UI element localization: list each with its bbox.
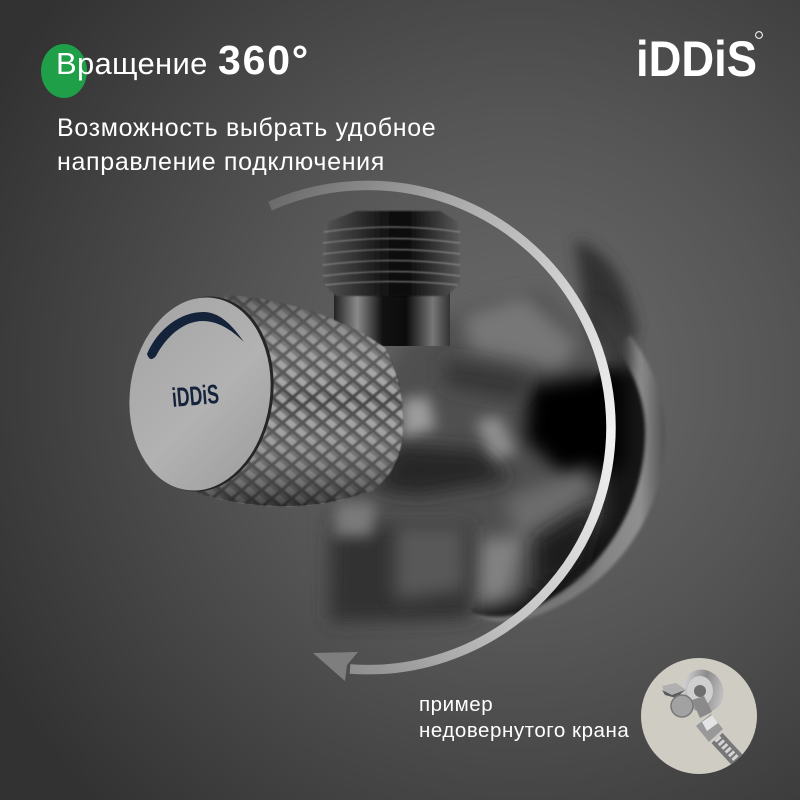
neck <box>334 284 450 346</box>
thread <box>323 211 460 296</box>
caption: пример <box>419 693 493 716</box>
arrowhead <box>313 652 358 681</box>
rotation ring with arrow <box>270 185 611 681</box>
valve cap <box>671 695 693 717</box>
lever <box>662 683 686 695</box>
green accent blob <box>41 44 87 98</box>
top threaded fitting <box>323 211 460 346</box>
description: Возможность выбрать удобное <box>57 114 436 142</box>
description: направление подключения <box>57 148 385 176</box>
cap logo: iDDiS <box>171 379 220 413</box>
wall flange chrome <box>682 670 724 711</box>
knurled handle <box>117 287 403 506</box>
braided hose <box>712 733 742 764</box>
motion-blurred valve body <box>325 290 625 622</box>
inset photo <box>641 658 757 776</box>
cap arc mark <box>147 312 244 359</box>
handle cap <box>120 287 286 501</box>
heading: Вращение <box>56 46 208 81</box>
heading: 360° <box>218 37 310 83</box>
caption: недовернутого крана <box>419 719 629 742</box>
nut <box>696 714 723 742</box>
connector <box>692 696 712 718</box>
brand logo: iDDiS <box>636 31 757 87</box>
wall flange <box>470 240 665 622</box>
